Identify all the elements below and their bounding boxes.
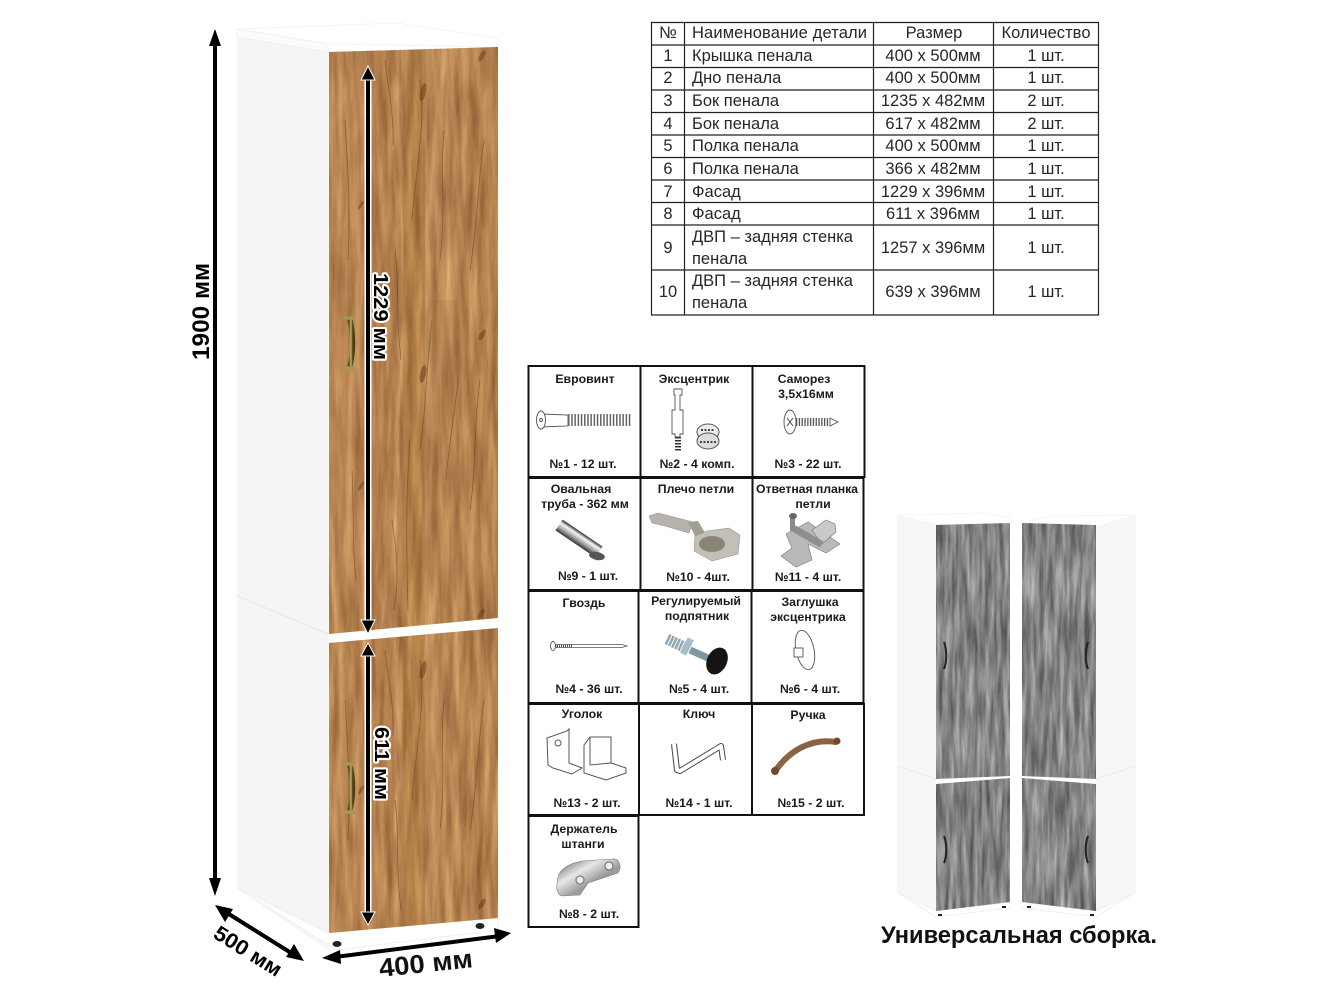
hardware grid xyxy=(528,366,864,927)
cell: Евровинт xyxy=(528,366,640,477)
cell: Эксцентрик: №2 - 4 комп. xyxy=(659,457,735,471)
cell: Эксцентрик xyxy=(640,366,752,477)
table rows: 400 х 500мм xyxy=(885,47,981,65)
cell: Овальная труба: Овальная xyxy=(551,482,611,496)
icon: adjustable foot xyxy=(667,639,732,678)
cell: Держатель штанги: Держатель xyxy=(550,822,618,836)
cell: Держатель штанги: штанги xyxy=(561,837,605,851)
cell: Ручка: Ручка xyxy=(790,708,826,722)
table rows: 611 х 396мм xyxy=(886,205,980,223)
table rows: 4 xyxy=(663,115,673,133)
table rows: Фасад xyxy=(692,205,741,223)
label 1900 мм: 1900 мм xyxy=(188,263,215,360)
table rows: 1 шт. xyxy=(1027,183,1065,201)
base xyxy=(897,892,1010,917)
cell: Ответная планка: петли xyxy=(795,497,831,511)
icon: hinge arm xyxy=(649,513,740,561)
parts table xyxy=(652,22,1098,315)
cell: Ключ xyxy=(639,704,752,815)
cell: Саморез: №3 - 22 шт. xyxy=(774,457,842,471)
door height arrow 611 мм xyxy=(361,643,375,925)
cell: Уголок: №13 - 2 шт. xyxy=(553,796,621,810)
table rows: 8 xyxy=(663,205,673,223)
table rows: 5 xyxy=(663,137,673,155)
table rows: Бок пенала xyxy=(692,115,780,133)
top panel xyxy=(1022,515,1136,527)
cell: Держатель штанги: №8 - 2 шт. xyxy=(559,907,619,921)
table header: Размер xyxy=(906,24,962,42)
icon: corner brackets xyxy=(547,729,626,780)
label 500 мм: 500 мм xyxy=(209,922,286,982)
table rows: 3 xyxy=(663,92,673,110)
width arrow 400 мм xyxy=(322,928,511,964)
cell: Плечо петли: №10 - 4шт. xyxy=(666,570,730,584)
side divider xyxy=(237,596,328,634)
label 1229 мм: 1229 мм xyxy=(369,273,391,360)
table rows: Дно пенала xyxy=(692,69,782,87)
caption: Универсальная сборка. xyxy=(881,922,1157,949)
icon: bronze handle xyxy=(771,738,840,775)
table rows: 1 шт. xyxy=(1027,69,1065,87)
cell: Ответная планка: Ответная планка xyxy=(756,482,858,496)
table rows: 2 шт. xyxy=(1027,115,1065,133)
lower grey door xyxy=(936,775,1011,915)
side panel xyxy=(897,516,936,917)
icon: rod holder xyxy=(557,859,620,896)
table rows: Крышка пенала xyxy=(692,47,813,65)
cell: Ручка xyxy=(752,704,864,815)
table rows: 1257 х 396мм xyxy=(881,239,985,257)
table rows: 7 xyxy=(663,183,673,201)
cell: Овальная труба xyxy=(528,478,640,590)
table rows: 1 шт. xyxy=(1027,160,1065,178)
cell: Евровинт: №1 - 12 шт. xyxy=(549,457,617,471)
table rows: 1 шт. xyxy=(1027,283,1065,301)
table rows: 639 х 396мм xyxy=(885,283,981,301)
cell: Заглушка эксцентрика: №6 - 4 шт. xyxy=(780,682,840,696)
table rows: 1 шт. xyxy=(1027,47,1065,65)
icon: eccentric xyxy=(672,389,719,451)
cell: Регулируемый подпятник xyxy=(638,591,752,703)
table rows: 2 шт. xyxy=(1027,92,1065,110)
table rows: пенала xyxy=(692,294,748,312)
table rows: 1 шт. xyxy=(1027,137,1065,155)
cell: Гвоздь: №4 - 36 шт. xyxy=(555,682,623,696)
depth arrow 500 мм xyxy=(215,905,304,961)
cell: Гвоздь xyxy=(528,591,638,703)
cell: Евровинт: Евровинт xyxy=(555,372,615,386)
cell: Плечо петли: Плечо петли xyxy=(658,482,734,496)
cell: Заглушка эксцентрика xyxy=(752,591,864,703)
table rows: Бок пенала xyxy=(692,92,780,110)
left corner cabinet xyxy=(897,513,1011,917)
side panel xyxy=(1096,516,1136,917)
cabinet top panel xyxy=(237,23,498,47)
cell: Заглушка эксцентрика: Заглушка xyxy=(781,595,839,609)
table header: Наименование детали xyxy=(692,24,867,42)
cell: Уголок: Уголок xyxy=(562,707,603,721)
table grid xyxy=(652,22,1098,315)
table rows: 617 х 482мм xyxy=(885,115,981,133)
table rows: 400 х 500мм xyxy=(885,137,981,155)
icon: tapping screw xyxy=(784,410,838,434)
upper grey door xyxy=(936,520,1011,782)
table rows: 1 шт. xyxy=(1027,239,1065,257)
height arrow 1900 мм xyxy=(209,29,221,896)
table rows: 400 х 500мм xyxy=(885,69,981,87)
cell: Ключ: Ключ xyxy=(683,707,715,721)
table rows: Полка пенала xyxy=(692,160,800,178)
table rows xyxy=(659,47,1065,312)
cell: Эксцентрик: Эксцентрик xyxy=(659,372,730,386)
base xyxy=(1022,892,1136,917)
cell: Заглушка эксцентрика: эксцентрика xyxy=(770,610,846,624)
cell: Регулируемый подпятник: Регулируемый xyxy=(651,594,741,608)
upper grey door xyxy=(1022,520,1097,782)
table rows: 366 х 482мм xyxy=(885,160,981,178)
icon: euro screw xyxy=(536,411,632,429)
table rows: 9 xyxy=(663,239,673,257)
table header: № xyxy=(659,24,677,42)
upper door handle xyxy=(345,317,353,369)
cell: Ответная планка xyxy=(752,478,864,590)
cell: Овальная труба: труба - 362 мм xyxy=(541,497,629,511)
table rows: 1229 х 396мм xyxy=(881,183,985,201)
door height arrow 1229 мм xyxy=(361,66,375,634)
side divider xyxy=(897,766,936,779)
right corner cabinet xyxy=(1022,515,1136,917)
cell: Регулируемый подпятник: подпятник xyxy=(665,609,730,623)
icon: hex key xyxy=(674,744,723,771)
cell: Ручка: №15 - 2 шт. xyxy=(777,796,845,810)
cell: Саморез: 3,5х16мм xyxy=(778,387,834,401)
icon: mounting plate xyxy=(781,513,840,567)
cell: Регулируемый подпятник: №5 - 4 шт. xyxy=(669,682,729,696)
table rows: 1 шт. xyxy=(1027,205,1065,223)
feet xyxy=(1027,906,1094,916)
cell: Саморез: Саморез xyxy=(778,372,830,386)
cell: Ответная планка: №11 - 4 шт. xyxy=(775,570,841,584)
icon: oval tube xyxy=(559,525,606,561)
lower door in wood xyxy=(329,620,499,940)
cabinet base xyxy=(237,888,498,950)
cabinet side panel xyxy=(237,37,328,950)
table rows: 2 xyxy=(663,69,673,87)
cell: Гвоздь: Гвоздь xyxy=(563,596,606,610)
cell: Уголок xyxy=(528,704,639,815)
cell: Овальная труба: №9 - 1 шт. xyxy=(558,569,618,583)
table rows: ДВП – задняя стенка xyxy=(692,272,854,290)
cabinet feet xyxy=(332,923,484,947)
upper door in wood xyxy=(329,47,499,637)
lower door handle xyxy=(345,763,353,813)
table rows: Полка пенала xyxy=(692,137,800,155)
top panel xyxy=(897,513,1010,525)
feet xyxy=(938,906,1006,916)
table rows: 10 xyxy=(659,283,677,301)
table header xyxy=(659,24,1090,42)
label 611 мм: 611 мм xyxy=(370,727,392,800)
table header: Количество xyxy=(1002,24,1090,42)
table rows: 1 xyxy=(663,47,673,65)
handles xyxy=(1086,642,1088,863)
handles xyxy=(944,642,946,863)
cell: Саморез xyxy=(752,366,864,477)
side divider xyxy=(1096,766,1136,779)
table rows: ДВП – задняя стенка xyxy=(692,228,854,246)
icon: eccentric cap xyxy=(792,629,818,671)
cell: Держатель штанги xyxy=(528,816,638,927)
table rows: 6 xyxy=(663,160,673,178)
cabinet top edge xyxy=(237,29,328,52)
cell: Плечо петли xyxy=(640,478,752,590)
table rows: пенала xyxy=(692,250,748,268)
icon: nail xyxy=(550,642,627,650)
cell: Ключ: №14 - 1 шт. xyxy=(665,796,733,810)
main cabinet xyxy=(237,23,499,950)
label 400 мм: 400 мм xyxy=(377,943,474,983)
table rows: 1235 х 482мм xyxy=(881,92,985,110)
table rows: Фасад xyxy=(692,183,741,201)
lower grey door xyxy=(1022,775,1097,915)
